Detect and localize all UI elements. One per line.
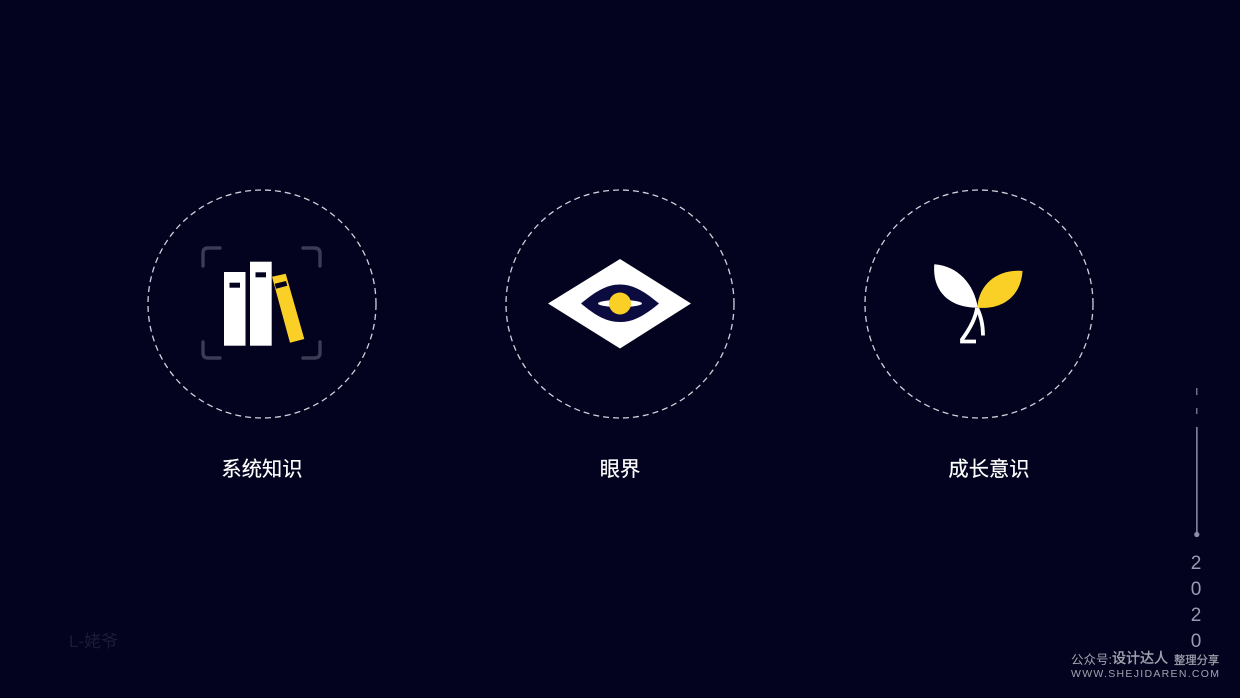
yellow planet xyxy=(609,292,631,314)
white leaf xyxy=(934,264,978,308)
icon: eye in diamond xyxy=(548,259,691,348)
white book left xyxy=(224,272,246,346)
dashed circle: system knowledge xyxy=(148,190,376,418)
author mark: L-姥爷 xyxy=(69,632,118,651)
year 2020 vertical xyxy=(1191,553,1201,652)
label: system knowledge: 系统知识 xyxy=(221,458,303,481)
white book right xyxy=(250,262,272,346)
year 2020 vertical: 0 xyxy=(1191,579,1201,600)
label: growth mindset: 成长意识 xyxy=(948,458,1030,481)
watermark: 设计达人 xyxy=(1112,650,1168,666)
watermark: 整理分享 xyxy=(1174,653,1219,667)
panel: growth mindset xyxy=(865,190,1093,481)
yellow leaning book xyxy=(272,274,304,343)
timeline marker xyxy=(1194,388,1199,537)
dashed circle: growth mindset xyxy=(865,190,1093,418)
label: vision: 眼界 xyxy=(600,459,640,481)
dashed circle: vision xyxy=(506,190,734,418)
panel: vision xyxy=(506,190,734,481)
eye shape xyxy=(581,284,659,322)
sprout stems xyxy=(962,308,983,342)
yellow leaf xyxy=(977,271,1022,308)
icon: books in viewfinder xyxy=(203,248,320,358)
year 2020 vertical: 2 xyxy=(1191,553,1201,574)
watermark: WWW.SHEJIDAREN.COM xyxy=(1071,668,1219,680)
year 2020 vertical: 0 xyxy=(1191,631,1201,652)
year 2020 vertical: 2 xyxy=(1191,605,1201,626)
watermark xyxy=(1071,650,1219,680)
viewfinder brackets xyxy=(203,248,320,358)
panel: system knowledge xyxy=(148,190,376,481)
watermark: 公众号: xyxy=(1071,653,1112,667)
planet ring xyxy=(598,300,642,307)
icon: sprout xyxy=(934,264,1022,342)
white diamond xyxy=(548,259,691,348)
